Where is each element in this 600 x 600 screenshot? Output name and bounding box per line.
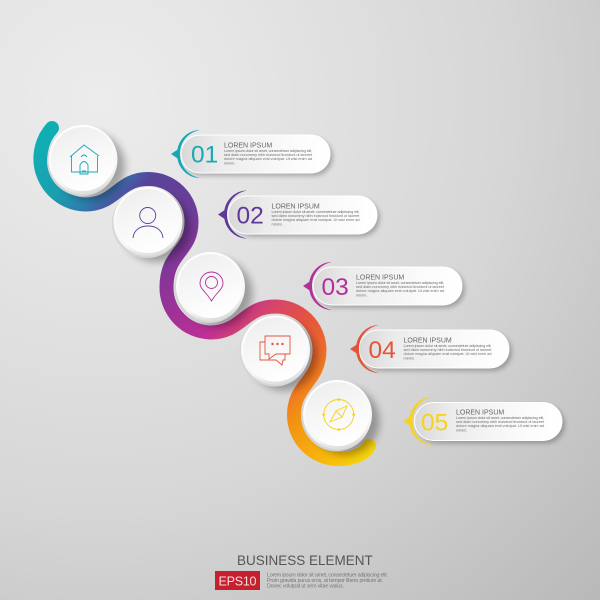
step 05 callout: sed diam nonummy nibh euismod tincidunt ut laoreet xyxy=(456,419,545,424)
step 04 callout: Lorem ipsum dolor sit amet, consectetuer adipiscing elit, xyxy=(404,343,492,348)
step 02 callout: 02 xyxy=(236,202,264,230)
step 02 callout: minim. xyxy=(272,222,283,226)
step 05 callout xyxy=(404,397,565,445)
step 05 callout: minim. xyxy=(456,428,467,432)
icon: person xyxy=(133,208,163,238)
ribbon path xyxy=(40,128,369,459)
circle 2 with person icon xyxy=(112,187,190,262)
step 02 callout: dolore magna aliquam erat volutpat. Ut wisi enim ad xyxy=(272,217,360,222)
step 03 callout xyxy=(303,262,465,310)
step 05 callout: dolore magna aliquam erat volutpat. Ut wisi enim ad xyxy=(456,423,544,428)
step 03 callout: 03 xyxy=(322,274,349,301)
step 05 callout: 05 xyxy=(421,410,448,436)
step 02 callout: LOREN IPSUM xyxy=(272,204,320,210)
circle 4 with chat icon xyxy=(240,316,318,390)
step 02 callout: sed diam nonummy nibh euismod tincidunt ut laoreet xyxy=(272,213,360,218)
icon: chat bubbles xyxy=(260,336,290,365)
icon: location pin xyxy=(200,272,223,301)
step 01 callout xyxy=(171,130,333,178)
step 04 callout: dolore magna aliquam erat volutpat. Ut wisi enim ad xyxy=(404,351,492,356)
step 04 callout: minim. xyxy=(404,356,415,360)
circle 1 with home icon xyxy=(47,125,125,200)
icon: compass xyxy=(322,398,355,431)
step 01 callout: LOREN IPSUM xyxy=(224,142,272,150)
circle 3 with location pin icon xyxy=(174,252,252,327)
step 04 callout: LOREN IPSUM xyxy=(404,338,452,344)
footer heading: BUSINESS ELEMENT xyxy=(237,553,373,568)
step 01 callout: minim. xyxy=(224,160,235,166)
step 04 callout: 04 xyxy=(368,337,396,364)
step 01 callout: dolore magna aliquam erat volutpat. Ut wisi enim ad xyxy=(224,156,312,161)
icon: home xyxy=(70,145,99,174)
step 05 callout: LOREN IPSUM xyxy=(456,410,504,416)
step 05 callout: Lorem ipsum dolor sit amet, consectetuer adipiscing elit, xyxy=(456,415,544,420)
step 03 callout: sed diam nonummy nibh euismod tincidunt ut laoreet xyxy=(356,284,445,289)
step 03 callout: minim. xyxy=(356,292,367,298)
step 01 callout: Lorem ipsum dolor sit amet, consectetuer adipiscing elit, xyxy=(224,148,312,153)
step 02 callout: Lorem ipsum dolor sit amet, consectetuer adipiscing elit, xyxy=(272,209,360,214)
step 01 callout: sed diam nonummy nibh euismod tincidunt ut laoreet xyxy=(224,152,313,157)
step 01 callout: 01 xyxy=(191,142,218,168)
footer description: Lorem ipsum dolor sit amet, consectetuer adipiscing elit. xyxy=(267,572,388,578)
step 02 callout xyxy=(218,190,380,238)
step 03 callout: LOREN IPSUM xyxy=(356,274,404,282)
circle 5 with compass icon xyxy=(302,380,380,455)
step 03 callout: Lorem ipsum dolor sit amet, consectetuer adipiscing elit, xyxy=(356,280,444,285)
EPS10 badge xyxy=(215,571,260,590)
step 04 callout: sed diam nonummy nibh euismod tincidunt ut laoreet xyxy=(404,347,492,352)
EPS10 badge: EPS10 xyxy=(218,574,257,588)
footer description: Proin gravida purus eros, at tempor libero pretium at. xyxy=(267,578,383,584)
step 04 callout xyxy=(350,325,512,373)
footer description: Donec volutpat ut sem vitae varius. xyxy=(267,584,344,590)
step 03 callout: dolore magna aliquam erat volutpat. Ut wisi enim ad xyxy=(356,288,444,293)
footer description xyxy=(267,572,388,590)
